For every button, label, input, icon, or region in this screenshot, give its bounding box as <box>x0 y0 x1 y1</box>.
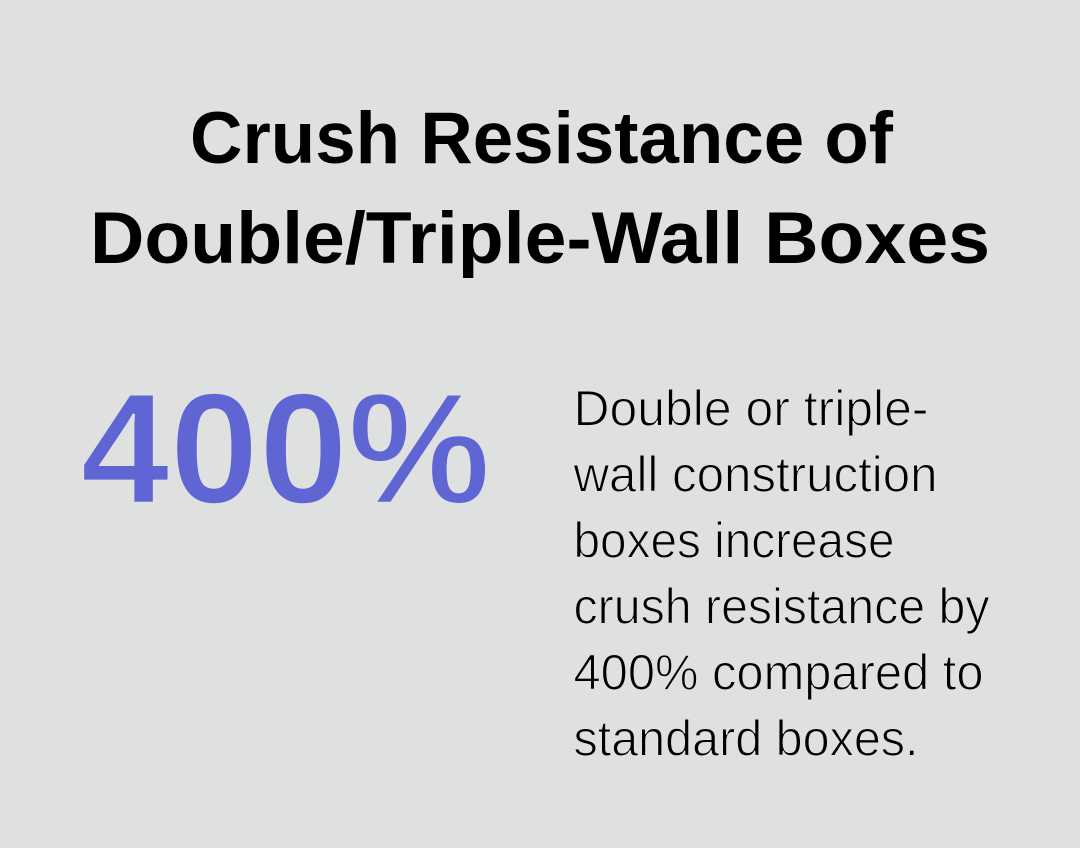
description text block: standard boxes. <box>574 710 918 766</box>
description text block: wall construction <box>573 446 938 502</box>
title: Crush Resistance of <box>190 98 894 179</box>
description text block: boxes increase <box>574 512 894 568</box>
description text block: crush resistance by <box>574 578 990 634</box>
description text block: Double or triple- <box>574 380 928 436</box>
big statistic: 400%: 400% <box>80 361 490 537</box>
title <box>90 98 990 279</box>
description text block: 400% compared to <box>574 644 984 700</box>
description text block <box>573 380 990 766</box>
title: Double/Triple-Wall Boxes <box>90 198 990 279</box>
